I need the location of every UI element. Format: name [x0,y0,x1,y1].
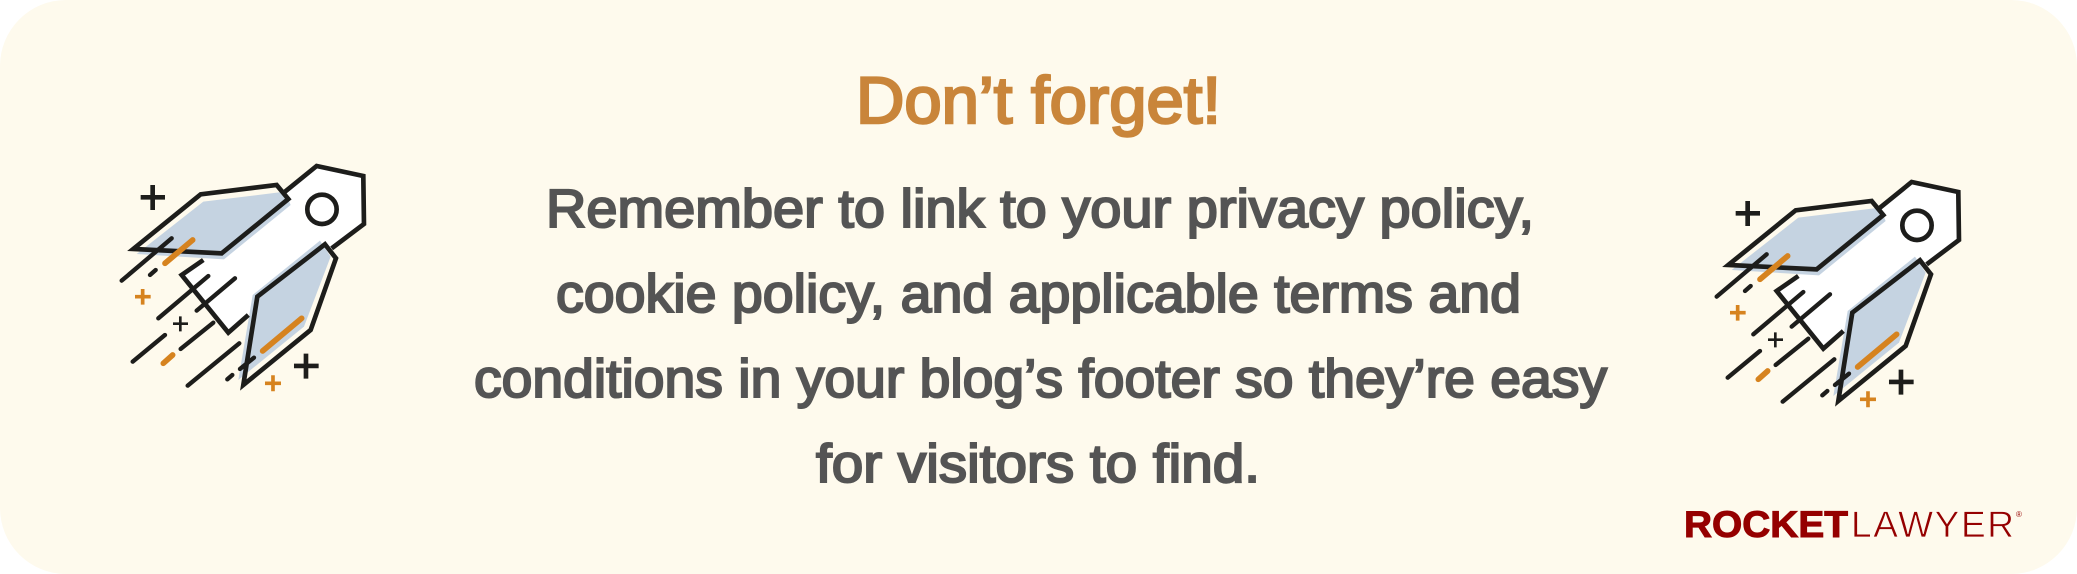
icon: left rocket [122,166,364,391]
text block: reminder [474,179,1607,494]
text block: reminder: cookie policy, and applicable terms and [556,264,1521,324]
icon: right rocket [1717,182,1959,407]
logo: Rocket Lawyer: ® [2016,510,2022,519]
title: Don’t forget! [856,63,1221,137]
text block: reminder: conditions in your blog’s footer so they’re easy [474,349,1607,409]
logo: Rocket Lawyer: LAWYER [1851,504,2014,545]
text block: reminder: for visitors to find. [816,434,1260,494]
logo: Rocket Lawyer: ROCKET [1684,504,1848,545]
text block: reminder: Remember to link to your privacy policy, [546,179,1534,239]
logo: Rocket Lawyer [1684,504,2022,545]
